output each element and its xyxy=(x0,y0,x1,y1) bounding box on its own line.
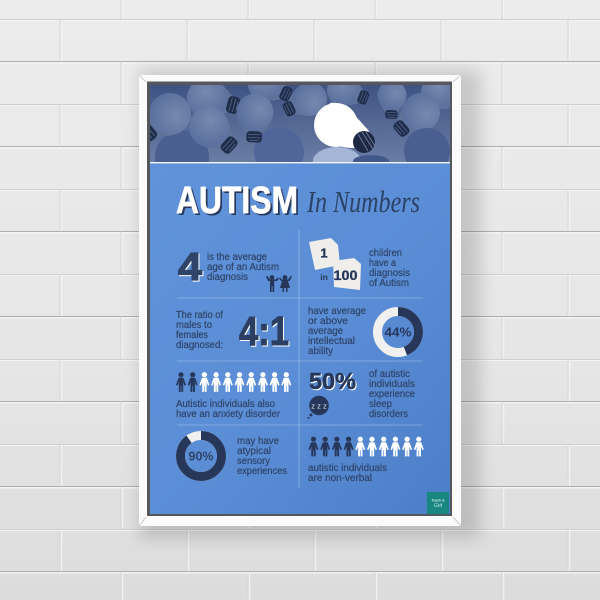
poster frame xyxy=(139,75,461,526)
stat: ratio 4:1: males to xyxy=(176,320,212,331)
stat: anxiety pictogram: have an anxiety disorder xyxy=(176,409,281,420)
stat: 90% sensory experiences: sensory xyxy=(237,456,271,467)
stat: anxiety pictogram xyxy=(176,372,291,420)
stat: 90% sensory experiences: atypical xyxy=(237,446,271,457)
icon: sleep bubble: z z z xyxy=(311,402,327,410)
stat: ratio 4:1: females xyxy=(176,330,208,341)
stat: 50% sleep disorders: of autistic xyxy=(369,369,410,380)
stat: ratio 4:1: 4:1 xyxy=(239,308,289,354)
frame shadow xyxy=(140,70,480,538)
teal logo badge: Grit xyxy=(434,503,443,509)
donut chart 90%: 90% xyxy=(188,450,214,464)
stat: 50% sleep disorders: experience xyxy=(369,389,415,400)
stat: average age 4: 4 xyxy=(178,246,202,289)
stat: 50% sleep disorders xyxy=(308,368,415,420)
stat: 50% sleep disorders: 50% xyxy=(310,369,357,395)
pictogram: 4 of 10 people xyxy=(308,437,424,456)
icon: paper note 1 xyxy=(309,238,340,270)
stat: average age 4: diagnosis xyxy=(207,272,248,283)
blue infographic panel xyxy=(150,162,450,514)
stat: 50% sleep disorders: sleep xyxy=(369,399,392,410)
stat: 1 in 100: of Autism xyxy=(369,278,409,289)
stat: 44% intellectual ability: intellectual xyxy=(308,336,355,347)
stat: ratio 4:1: 4:1 xyxy=(240,309,290,355)
stat: 1 in 100: diagnosis xyxy=(369,268,410,279)
stat: average age 4: age of an Autism xyxy=(207,262,279,273)
stat: non-verbal pictogram: autistic individuals xyxy=(308,463,387,474)
teal logo badge xyxy=(427,492,449,514)
stat: 1 in 100: 1 xyxy=(320,246,328,260)
stat: 1 in 100: in xyxy=(320,272,328,282)
dividers xyxy=(177,230,423,488)
stat: 90% sensory experiences: may have xyxy=(237,436,279,447)
icon: two children xyxy=(266,275,292,292)
stat: 44% intellectual ability: or above xyxy=(308,316,348,327)
stat: 1 in 100: have a xyxy=(369,258,396,269)
title xyxy=(176,180,420,224)
stat: 1 in 100 xyxy=(309,238,410,290)
stat: average age 4: is the average xyxy=(207,252,267,263)
stat: ratio 4:1 xyxy=(176,308,290,355)
photo: light bulbs xyxy=(150,85,450,162)
lit bulb xyxy=(314,103,375,153)
pictogram: 2 of 10 people xyxy=(176,372,291,392)
stat: ratio 4:1: diagnosed: xyxy=(176,340,223,351)
reflection of lit bulb xyxy=(313,147,360,162)
stat: 1 in 100: 100 xyxy=(334,268,358,283)
stat: 44% intellectual ability: have average xyxy=(308,306,366,317)
stat: 1 in 100: children xyxy=(369,248,402,259)
stat: 44% intellectual ability xyxy=(308,306,418,357)
stat: anxiety pictogram: Autistic individuals also xyxy=(176,399,275,410)
teal logo badge: Teach & xyxy=(431,498,445,502)
stat: average age 4: 4 xyxy=(179,247,203,290)
title: AUTISM xyxy=(178,182,300,224)
stat: 90% sensory experiences xyxy=(180,436,287,477)
stat: non-verbal pictogram xyxy=(308,437,424,484)
stat: 50% sleep disorders: 50% xyxy=(309,368,356,394)
stat: 44% intellectual ability: ability xyxy=(308,346,334,357)
stat: 50% sleep disorders: individuals xyxy=(369,379,415,390)
stat: 44% intellectual ability: average xyxy=(308,326,343,337)
stat: 50% sleep disorders: disorders xyxy=(369,409,408,420)
stat: non-verbal pictogram: are non-verbal xyxy=(308,473,372,484)
stat: average age 4 xyxy=(178,246,292,292)
donut chart 44%: 44% xyxy=(384,326,412,340)
title: AUTISM xyxy=(176,180,298,222)
title: In Numbers xyxy=(306,184,420,219)
stat: 90% sensory experiences: experiences xyxy=(237,466,287,477)
stat: ratio 4:1: The ratio of xyxy=(176,310,223,321)
icon: paper note 100 xyxy=(333,258,361,290)
